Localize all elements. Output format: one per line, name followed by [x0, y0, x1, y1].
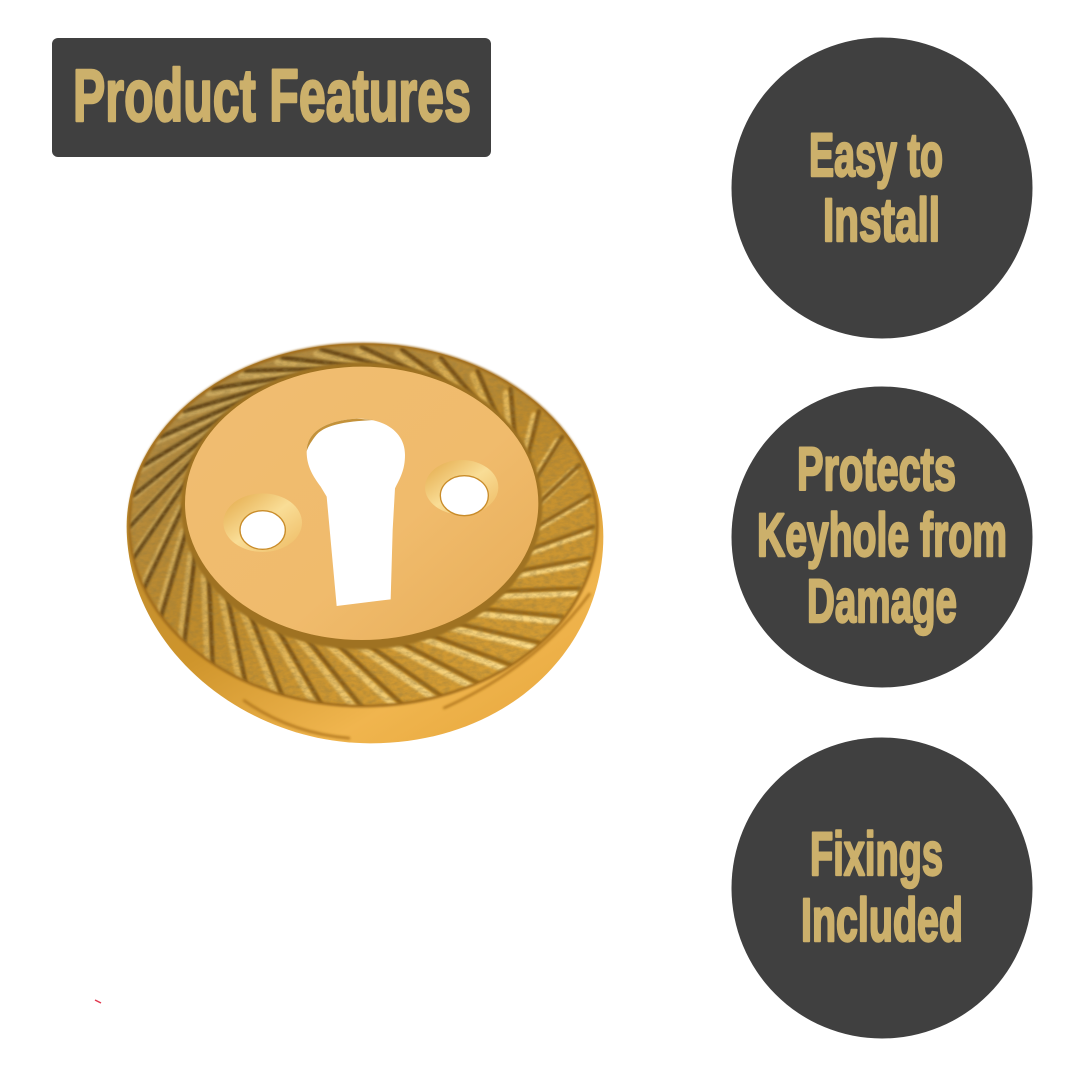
- central plate: [185, 367, 538, 640]
- feature badge: Fixings Included: [732, 738, 1032, 1038]
- heading: Product Features: Product Features: [73, 54, 471, 137]
- outer rim: [127, 343, 603, 743]
- feature badge: Fixings Included: Included: [801, 886, 963, 954]
- feature badge: Protects Keyhole from Damage: [732, 386, 1032, 688]
- red speck: [95, 1000, 101, 1003]
- product photo: brass keyhole escutcheon: [125, 343, 603, 743]
- rim crease lines: [243, 593, 590, 738]
- feature badge: Protects Keyhole from Damage: Protects: [797, 435, 956, 503]
- feature badge: Protects Keyhole from Damage: Damage: [807, 567, 957, 635]
- feature badge: Easy to Install: Install: [823, 186, 940, 254]
- feature badge: Easy to Install: [732, 38, 1032, 338]
- feature badge: Fixings Included: Fixings: [810, 820, 943, 888]
- heading: Product Features: [52, 38, 491, 157]
- right screw hole: [425, 460, 498, 516]
- left screw hole: [223, 493, 302, 552]
- keyhole: [307, 419, 405, 606]
- feature badge: Easy to Install: Easy to: [809, 121, 943, 189]
- plate bevel: [181, 363, 542, 649]
- rope band: [125, 343, 603, 711]
